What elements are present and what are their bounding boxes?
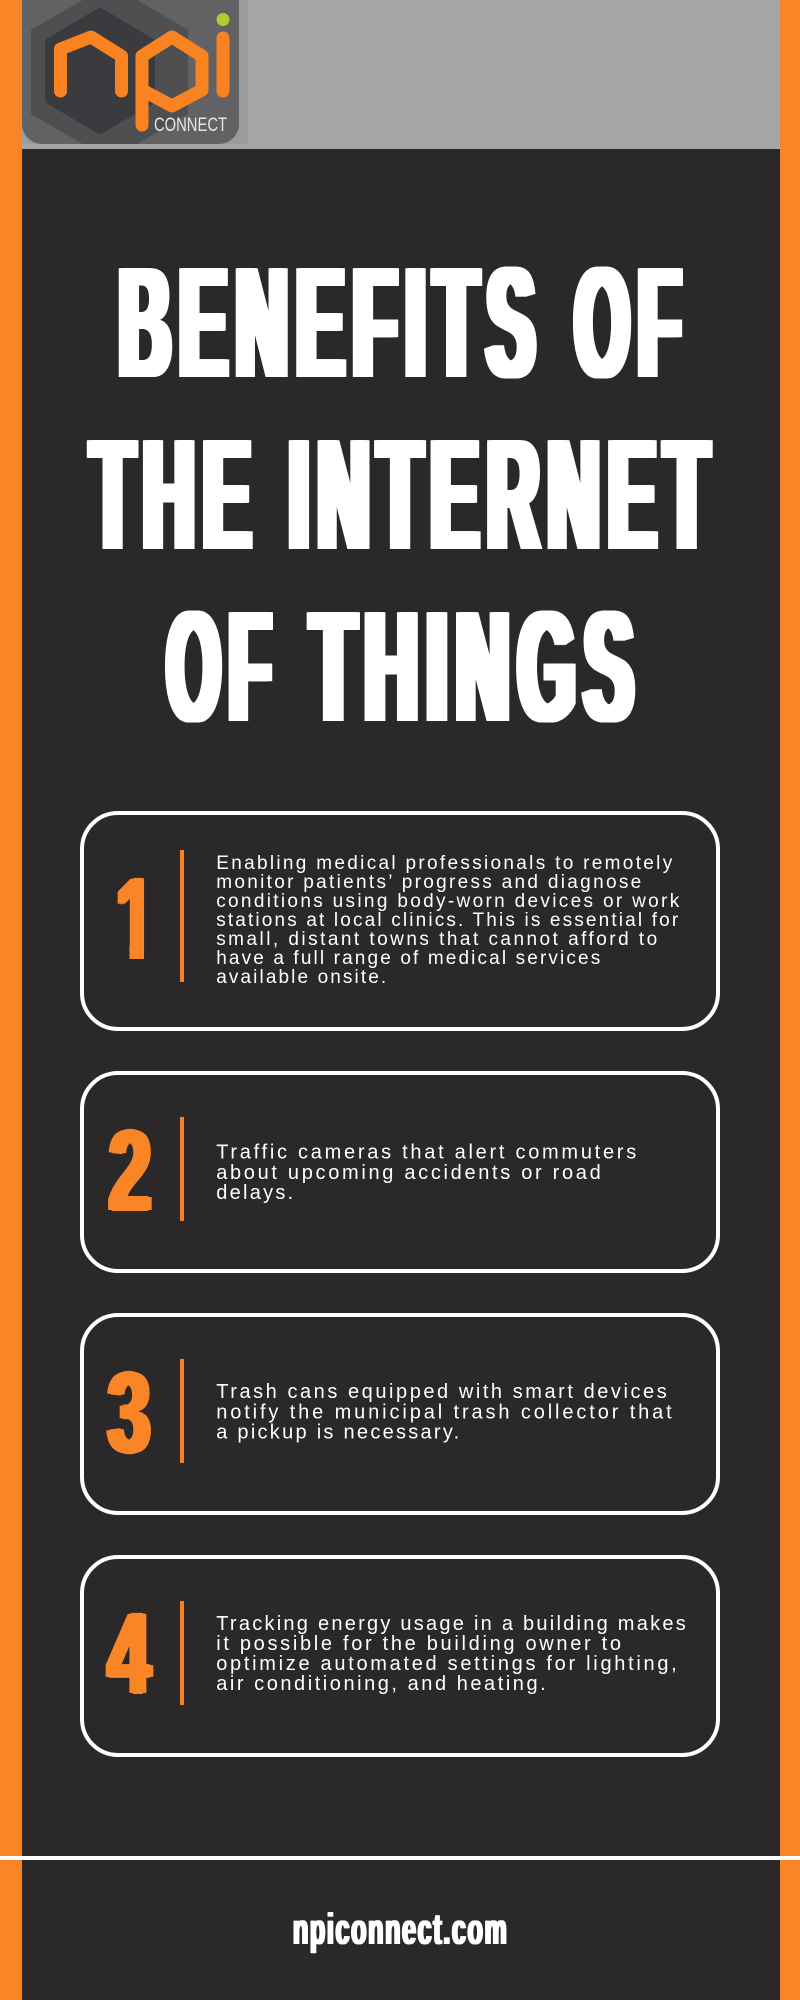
left orange stripe [0,0,22,2000]
text 4: Tracking energy usage in a building makes [216,1613,686,1635]
right orange stripe [780,0,800,2000]
number 2: 2 [109,1107,152,1235]
text 3 [216,1381,672,1443]
text 4 [216,1613,686,1695]
title: INTERNET [289,407,717,583]
text 3: Trash cans equipped with smart devices [216,1381,667,1403]
text 1: have a full range of medical services [216,948,600,969]
divider 2 [180,1117,184,1221]
text 2: delays. [216,1182,293,1204]
number 3: 3 [108,1349,150,1477]
card 2 [80,1071,720,1273]
title: OF [167,579,279,755]
card 1 [80,811,720,1031]
title: THE [91,407,259,583]
text 1: Enabling medical professionals to remotely [216,853,673,874]
text 1 [216,853,680,988]
text 2: Traffic cameras that alert commuters [216,1142,636,1164]
title [86,235,717,755]
logo: npi connect: CONNECT [154,115,227,136]
number 1: 1 [116,855,156,983]
text 1: stations at local clinics. This is essential for [216,910,679,931]
text 1: conditions using body-worn devices or work [216,891,680,912]
title: OF [575,235,690,411]
text 1: monitor patients’ progress and diagnose [216,872,641,893]
divider 1 [180,850,184,982]
footer website: npiconnect.com [293,1905,508,1954]
card 3 [80,1313,720,1515]
divider 4 [180,1601,184,1705]
header band [22,0,780,149]
text 4: air conditioning, and heating. [216,1673,546,1695]
text 1: small, distant towns that cannot afford to [216,929,657,950]
text 2: about upcoming accidents or road [216,1162,601,1184]
text 4: it possible for the building owner to [216,1633,621,1655]
text 2 [216,1142,636,1204]
footer divider line [0,1856,800,1860]
logo: npi connect [22,0,248,144]
text 4: optimize automated settings for lighting, [216,1653,677,1675]
number 4: 4 [108,1590,150,1718]
text 3: notify the municipal trash collector that [216,1401,672,1423]
text 3: a pickup is necessary. [216,1421,459,1443]
title: BENEFITS [119,235,544,411]
title: THINGS [311,579,642,755]
divider 3 [180,1359,184,1463]
card 4 [80,1555,720,1757]
text 1: available onsite. [216,967,386,988]
